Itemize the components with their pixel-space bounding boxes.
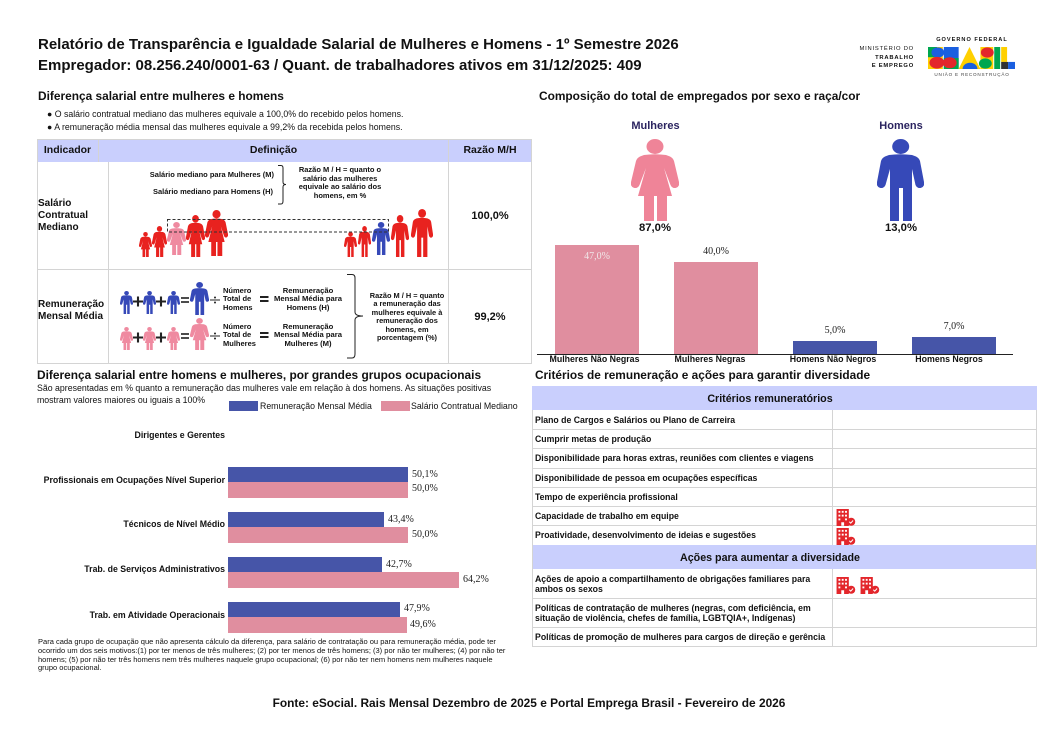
bar chart: composição: 7,0%: [944, 321, 964, 332]
rows: critérios text: Cumprir metas de produção: [535, 434, 651, 444]
definition: remuneração labels: [223, 286, 342, 348]
logo: governo federal brasil: [928, 37, 1015, 77]
text block: resumo: [47, 109, 403, 132]
heading: critérios: Critérios de remuneração e ações para garantir diversidade: [535, 368, 870, 382]
bar chart: composição: [537, 245, 1013, 364]
logo: governo federal brasil: GOVERNO FEDERAL: [936, 37, 1008, 43]
definition: salário labels: [150, 165, 381, 204]
bar chart: grupos ocupacionais: 64,2%: [463, 574, 489, 585]
panel: critérios remuneratórios: [532, 386, 1037, 647]
panel: tabela indicadores: [37, 139, 532, 364]
heading: composição: Composição do total de empregados por sexo e raça/cor: [539, 89, 860, 103]
bar chart: composição: 47,0%: [584, 251, 610, 262]
heading: diferença por grupos: Diferença salarial entre homens e mulheres, por grandes grupos ocupacionais: [37, 368, 481, 382]
definition: razão remuneração: a remuneração das: [373, 299, 441, 308]
bar chart: composição: Homens Não Negros: [790, 354, 876, 364]
bar chart: grupos ocupacionais: 50,0%: [412, 483, 438, 494]
icon: empresa capacidade: [836, 509, 856, 526]
panel: tabela indicadores: Razão M/H: [463, 144, 517, 156]
bar chart: composição: Mulheres Não Negras: [550, 354, 639, 364]
band: ações: Ações para aumentar a diversidade: [680, 552, 860, 564]
text block: nota: ocorrido um dos seis motivos:(1) por ter menos de três mulheres; (2) por ter menos de três homens; (3) por não ter mulheres; (4) por não ter: [38, 646, 505, 655]
text block: explicação: [37, 383, 491, 405]
title: Empregador: 08.256.240/0001-63 / Quant. de trabalhadores ativos em 31/12/2025: 409: [38, 57, 642, 74]
panel: tabela indicadores: Definição: [250, 144, 297, 156]
bar chart: grupos ocupacionais: Técnicos de Nível Médio: [123, 519, 225, 529]
definition: remuneração labels: Número: [223, 286, 251, 294]
legend: Salário Contratual Mediano: [411, 401, 518, 411]
rows: critérios text: Disponibilidade de pessoa em ocupações específicas: [535, 473, 757, 483]
title: [38, 36, 679, 74]
text block: nota: Para cada grupo de ocupação que não apresenta cálculo da diferença, para salário de contratação ou para remuneração média, pode ter: [38, 637, 496, 646]
value: 100,0%: 100,0%: [471, 210, 509, 222]
title: Relatório de Transparência e Igualdade Salarial de Mulheres e Homens - 1º Semestre 2026: [38, 36, 679, 53]
rows: critérios text: Capacidade de trabalho em equipe: [535, 511, 679, 521]
text block: resumo: ● A remuneração média mensal das mulheres equivale a 99,2% da recebida pelos homens.: [47, 122, 402, 132]
rows: critérios text: ambos os sexos: [535, 584, 603, 594]
definition: razão remuneração: porcentagem (%): [377, 333, 437, 342]
row label: remuneração mensal média: Remuneração: [38, 299, 104, 310]
text block: resumo: ● O salário contratual mediano das mulheres equivale a 100,0% do recebido pelos homens.: [47, 109, 403, 119]
legend: Remuneração Mensal Média: [260, 401, 372, 411]
definition: remuneração labels: Número: [223, 322, 251, 330]
legend: [229, 401, 518, 411]
definition: salário labels: Salário mediano para Mulheres (M): [150, 170, 274, 179]
bar chart: grupos ocupacionais: [44, 430, 489, 633]
value: 13,0%: 13,0%: [885, 222, 917, 234]
label: homens: Homens: [879, 120, 923, 132]
heading: diferença salarial: Diferença salarial entre mulheres e homens: [38, 89, 284, 103]
definition: salário labels: equivale ao salário dos: [299, 182, 381, 191]
bar chart: grupos ocupacionais: 50,1%: [412, 469, 438, 480]
footer: fonte: Fonte: eSocial. Rais Mensal Dezembro de 2025 e Portal Emprega Brasil - Fevereiro de 2026: [273, 696, 785, 710]
rows: critérios text: Políticas de promoção de mulheres para cargos de direção e gerência: [535, 632, 825, 642]
panel: tabela indicadores: Indicador: [44, 144, 91, 156]
rows: critérios text: situação de violência, chefes de família, LGBTQIA+, Indígenas): [535, 613, 795, 623]
text block: explicação: mostram valores maiores ou iguais a 100%: [37, 394, 205, 404]
logo: governo federal brasil: UNIÃO E RECONSTRUÇÃO: [934, 72, 1010, 77]
bar chart: grupos ocupacionais: 47,9%: [404, 603, 430, 614]
row label: remuneração mensal média: [38, 299, 104, 322]
icon: homem: [877, 139, 924, 221]
bar chart: composição: 5,0%: [825, 325, 845, 336]
label: mulheres: Mulheres: [631, 120, 680, 132]
row label: salário contratual mediano: [38, 198, 88, 233]
bar chart: composição: Homens Negros: [915, 354, 983, 364]
rows: critérios text: Tempo de experiência profissional: [535, 492, 678, 502]
definition: remuneração labels: Homens: [223, 303, 253, 312]
logo: ministério: E EMPREGO: [872, 63, 914, 69]
text block: nota: grupo ocupacional.: [38, 663, 102, 672]
definition: salário labels: salário das mulheres: [303, 174, 377, 183]
table header: [37, 139, 532, 162]
bar chart: composição: Mulheres Negras: [675, 354, 745, 364]
bar chart: grupos ocupacionais: Profissionais em Ocupações Nível Superior: [44, 475, 225, 485]
band: critérios: [532, 386, 1037, 410]
definition: razão remuneração: mulheres equivale à: [372, 308, 442, 316]
definition: remuneração labels: Mensal Média para: [274, 294, 342, 303]
icon: empresa proatividade: [836, 528, 856, 545]
definition: salário labels: Razão M / H = quanto o: [299, 165, 381, 174]
row label: salário contratual mediano: Salário: [38, 198, 71, 209]
bar chart: grupos ocupacionais: Dirigentes e Gerentes: [135, 430, 225, 440]
value: 87,0%: 87,0%: [639, 222, 671, 234]
rows: critérios text: Políticas de contratação de mulheres (negras, com deficiência, em: [535, 603, 811, 613]
definition: remuneração labels: Mulheres: [223, 339, 256, 348]
icon: empresa ações 2: [860, 577, 880, 594]
bar chart: grupos ocupacionais: Trab. em Atividade Operacionais: [90, 610, 225, 620]
bar chart: grupos ocupacionais: 50,0%: [412, 529, 438, 540]
definition: remuneração labels: Mensal Média para: [274, 330, 342, 339]
icon: mulher: [631, 139, 679, 221]
definition: salário labels: Salário mediano para Homens (H): [153, 187, 273, 196]
logo: ministério: [859, 45, 914, 69]
band: critérios: Critérios remuneratórios: [707, 393, 833, 405]
rows: critérios text: Disponibilidade para horas extras, reuniões com clientes e viagens: [535, 453, 814, 463]
definition: salário labels: homens, em %: [314, 191, 366, 200]
row label: salário contratual mediano: Mediano: [38, 222, 79, 233]
icon: empresa ações 1: [836, 577, 856, 594]
rows: critérios text: Proatividade, desenvolvimento de ideias e sugestões: [535, 530, 756, 540]
definition: remuneração labels: Mulheres (M): [284, 339, 332, 348]
bar chart: grupos ocupacionais: Trab. de Serviços Administrativos: [84, 564, 225, 574]
definition: remuneração labels: Remuneração: [283, 286, 333, 294]
logo: ministério: TRABALHO: [875, 54, 914, 60]
row label: salário contratual mediano: Contratual: [38, 210, 88, 221]
bar chart: grupos ocupacionais: 49,6%: [410, 619, 436, 630]
bar chart: grupos ocupacionais: 42,7%: [386, 559, 412, 570]
definition: remuneração labels: Homens (H): [287, 303, 329, 312]
definition: razão remuneração: [370, 290, 444, 342]
definition: razão remuneração: homens, em: [385, 324, 429, 334]
definition: remuneração labels: Remuneração: [283, 322, 333, 330]
text block: nota: [38, 637, 506, 672]
bar chart: composição: 40,0%: [703, 246, 729, 257]
rows: critérios text: Plano de Cargos e Salários ou Plano de Carreira: [535, 415, 735, 425]
text block: nota: homens; (5) por não ter três homens nem três mulheres naquele grupo ocupacional; (6) por não ter nem homens nem mulheres naquele: [38, 655, 493, 664]
rows: critérios text: [535, 415, 826, 642]
definition: remuneração labels: Total de: [223, 294, 251, 303]
definition: razão remuneração: remuneração dos: [376, 316, 438, 325]
definition: remuneração labels: Total de: [223, 330, 251, 339]
text block: explicação: São apresentadas em % quanto a remuneração das mulheres vale em relação à dos homens. As situações positivas: [37, 383, 491, 393]
logo: ministério: MINISTÉRIO DO: [859, 46, 914, 52]
row label: remuneração mensal média: Mensal Média: [38, 311, 103, 322]
rows: critérios text: Ações de apoio a compartilhamento de obrigações familiares para: [535, 574, 810, 584]
value: 99,2%: 99,2%: [474, 311, 506, 323]
definition: razão remuneração: Razão M / H = quanto: [370, 290, 444, 300]
band: ações: [532, 545, 1037, 569]
bar chart: grupos ocupacionais: 43,4%: [388, 514, 414, 525]
